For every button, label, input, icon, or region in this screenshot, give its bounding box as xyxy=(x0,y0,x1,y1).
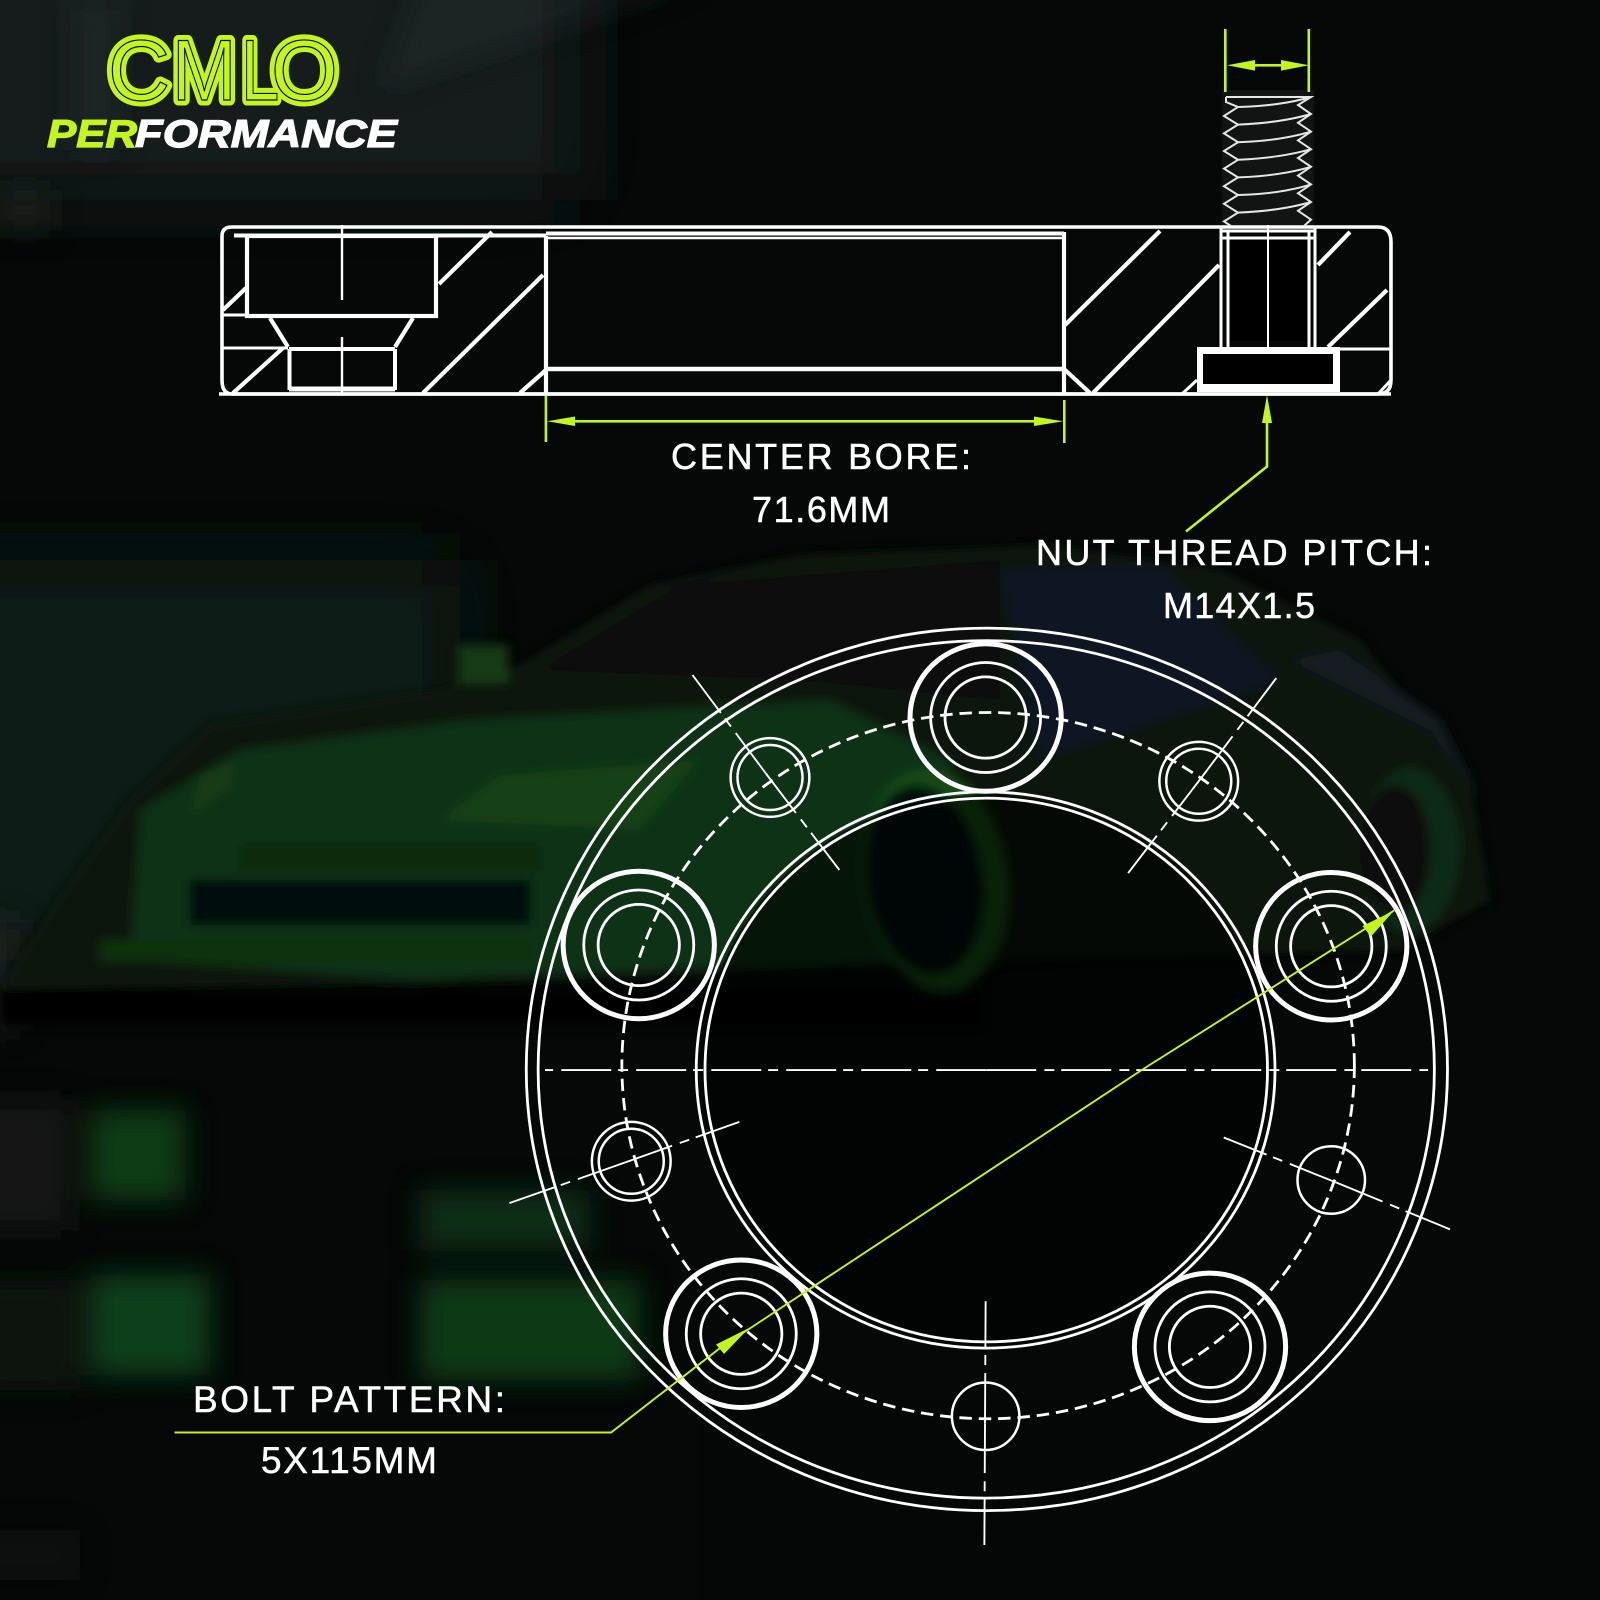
logo mark: CMLO: L xyxy=(241,23,279,119)
logo mark inner line: M xyxy=(172,23,236,119)
label: center bore xyxy=(671,436,971,530)
leader: bolt pattern diameter arrow xyxy=(174,911,1394,1432)
stud hole xyxy=(1228,239,1310,341)
label: nut thread pitch xyxy=(1036,532,1432,626)
center bore rings xyxy=(696,792,1275,1348)
left counterbore xyxy=(247,236,436,316)
dark bore fill xyxy=(701,795,1271,1345)
logo mark inner line: C xyxy=(108,23,170,119)
label: bolt pattern: 5X115MM xyxy=(261,1440,437,1481)
logo mark: CMLO: M xyxy=(172,23,236,119)
label: bolt pattern xyxy=(193,1379,505,1481)
hatching xyxy=(223,232,546,393)
front wheel xyxy=(848,759,1022,1001)
dimension: center bore arrow xyxy=(545,396,1066,443)
centerlines xyxy=(509,675,1450,1545)
large bolt holes xyxy=(563,644,1407,1421)
logo mark inner line xyxy=(108,23,338,119)
label: nut thread pitch: M14X1.5 xyxy=(1163,585,1315,626)
front view drawing of spacer xyxy=(509,628,1450,1545)
side section drawing of spacer xyxy=(219,225,1391,394)
dimension: thread diameter arrow xyxy=(1224,29,1310,92)
logo mark inner line: L xyxy=(241,23,279,119)
logo mark inner line: O xyxy=(271,23,338,119)
logo mark: CMLO: C xyxy=(108,23,170,119)
top surface lines xyxy=(234,234,1064,236)
outer rings xyxy=(526,628,1448,1511)
logo wordmark: PERFORMANCE: FORMANCE xyxy=(135,113,398,156)
bolt circle dashed xyxy=(622,712,1354,1419)
car silhouette xyxy=(0,545,1490,990)
small holes xyxy=(592,738,1365,1450)
logo wordmark: PERFORMANCE: PER xyxy=(47,113,137,156)
label: center bore: 71.6MM xyxy=(752,489,890,530)
nut head xyxy=(1197,347,1340,392)
leader: nut thread pitch xyxy=(1186,395,1272,532)
threaded stud xyxy=(1222,90,1314,226)
windshield xyxy=(540,560,1000,700)
logo: CMLO Performance xyxy=(47,23,398,156)
rear wheel xyxy=(1360,768,1460,932)
logo mark: CMLO xyxy=(108,23,338,119)
center bore xyxy=(546,232,1064,394)
label: nut thread pitch: NUT THREAD PITCH: xyxy=(1036,532,1432,573)
label: bolt pattern: BOLT PATTERN: xyxy=(193,1379,505,1420)
logo mark: CMLO: O xyxy=(271,23,338,119)
logo wordmark: PERFORMANCE xyxy=(47,113,398,156)
label: center bore: CENTER BORE: xyxy=(671,436,971,477)
flange outline xyxy=(222,227,1391,394)
